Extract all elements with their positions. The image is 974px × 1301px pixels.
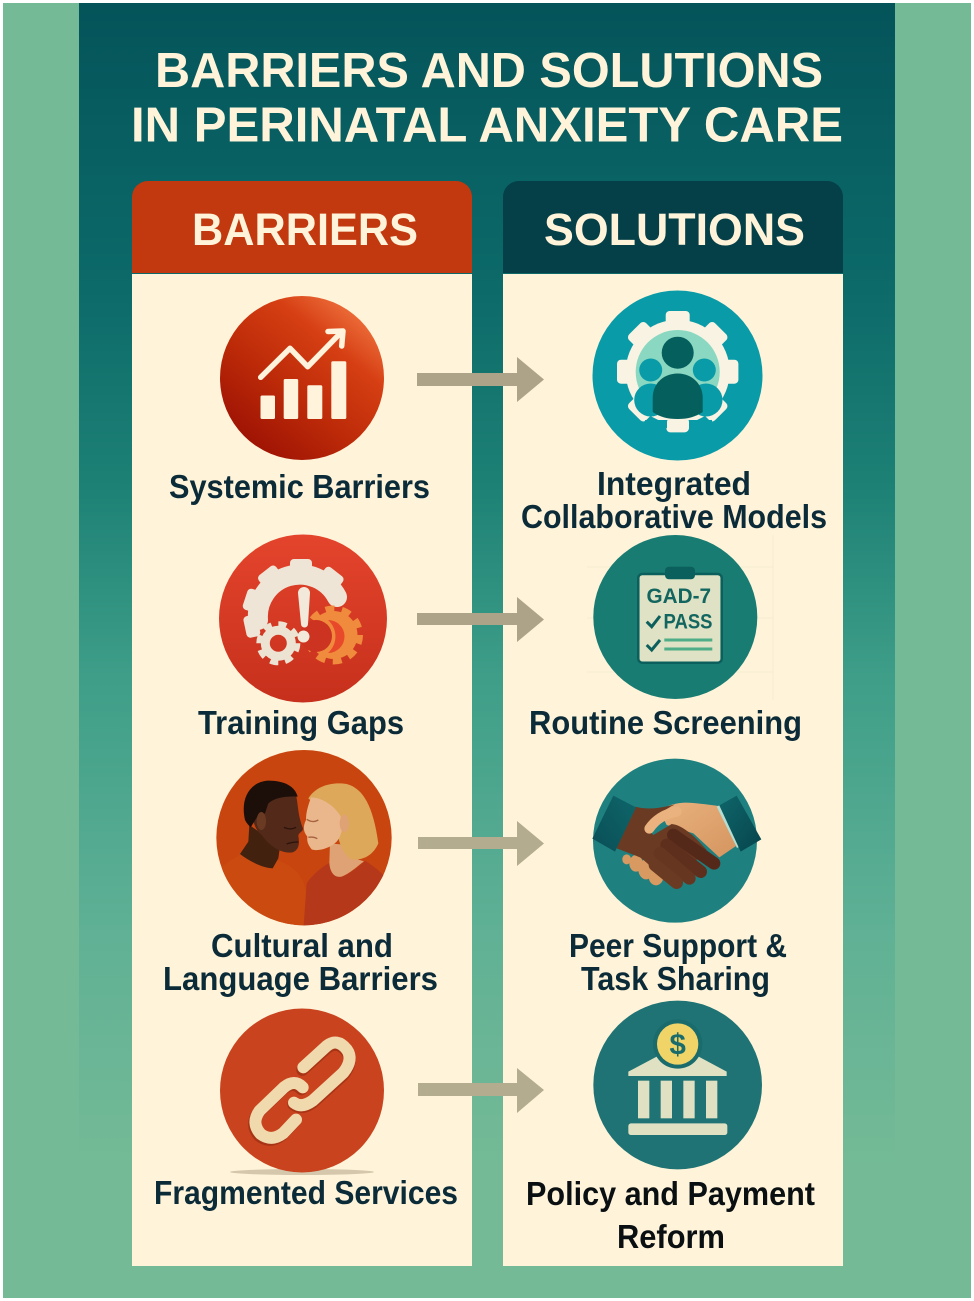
light hand [660, 803, 736, 857]
icon: integrated care gear and people [592, 290, 762, 460]
barriers column background [132, 274, 472, 1266]
right shirt cuff [718, 806, 738, 847]
woman's shirt [304, 860, 384, 926]
label: training gaps: Training Gaps [198, 704, 404, 741]
label: policy and payment reform: Reform [617, 1218, 725, 1255]
label: routine screening: Routine Screening [529, 704, 802, 741]
label: peer support and task sharing [569, 927, 787, 997]
icon: bank with dollar coin [593, 1001, 762, 1169]
small gear [259, 624, 298, 663]
title: BARRIERS AND SOLUTIONS [155, 44, 823, 98]
man's neck [240, 825, 280, 868]
label: integrated collaborative models: Collaborative Models [521, 498, 827, 535]
label: policy and payment reform [526, 1175, 815, 1255]
label: integrated collaborative models [521, 465, 827, 535]
dark hand palm [617, 804, 707, 880]
label: fragmented services: Fragmented Services [154, 1174, 458, 1211]
label: cultural and language barriers: Language Barriers [163, 960, 438, 997]
woman's face [304, 797, 342, 850]
barriers header: BARRIERS [192, 204, 418, 255]
man's shirt [222, 867, 304, 926]
light thumb [649, 812, 677, 829]
solutions header [503, 181, 843, 273]
label: cultural and language barriers [163, 927, 438, 997]
panel: solutions [503, 181, 843, 1266]
arrow: systemic barriers to integrated models [417, 357, 544, 402]
left cuff [592, 796, 636, 852]
man's face [253, 795, 303, 853]
light hand fingers [622, 854, 663, 885]
arrow: cultural barriers to peer support [418, 821, 544, 866]
exclamation mark [298, 587, 310, 642]
orange gear [300, 608, 360, 662]
title [131, 44, 843, 152]
icon: GAD-7 clipboard: GAD-7 [646, 585, 711, 608]
label: integrated collaborative models: Integrated [597, 465, 751, 502]
icon: training gaps gears [219, 534, 387, 702]
label: systemic barriers: Systemic Barriers [169, 468, 430, 505]
icon: GAD-7 clipboard: PASS [664, 610, 712, 634]
panel: barriers [132, 181, 472, 1266]
label: policy and payment reform: Policy and Payment [526, 1175, 815, 1212]
icon: bank with dollar coin: $ [670, 1029, 686, 1062]
label: peer support and task sharing: Peer Support & [569, 927, 787, 964]
icon: broken chain links [220, 1008, 384, 1175]
arrow: training gaps to routine screening [417, 597, 544, 642]
label: peer support and task sharing: Task Sharing [581, 960, 770, 997]
solutions column background [503, 274, 843, 1266]
barriers header [132, 181, 472, 273]
man's hair [244, 781, 298, 827]
right cuff [719, 796, 761, 852]
icon: systemic barriers chart [220, 296, 384, 460]
dark hand fingers [655, 835, 714, 883]
icon: GAD-7 clipboard [587, 535, 773, 700]
title: IN PERINATAL ANXIETY CARE [131, 98, 843, 152]
solutions header: SOLUTIONS [544, 204, 805, 255]
woman's hair [308, 783, 378, 860]
icon: couple portrait [213, 750, 393, 930]
woman's neck [329, 843, 364, 877]
arrow: fragmented services to policy reform [418, 1068, 544, 1113]
label: cultural and language barriers: Cultural and [211, 927, 393, 964]
icon: handshake [592, 759, 761, 923]
